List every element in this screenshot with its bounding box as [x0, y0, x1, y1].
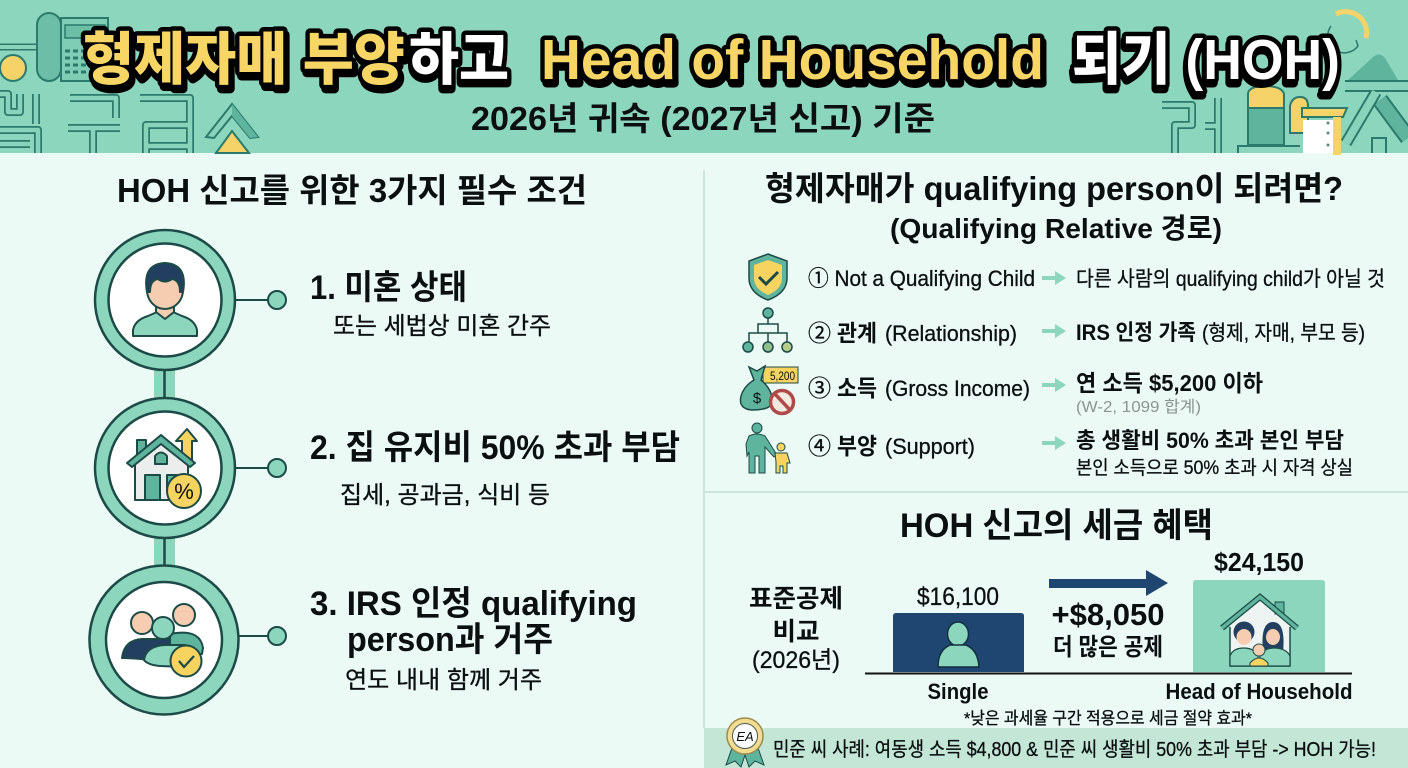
baseline	[865, 672, 1352, 674]
title: 형제자매 부양	[83, 28, 405, 92]
row 2 detail	[1076, 320, 1365, 345]
row 4 detail: 본인 소득으로 50% 초과 시 자격 상실	[1076, 457, 1353, 479]
title: 하고	[409, 32, 509, 96]
heading: qualifying person: 형제자매가 qualifying person이 되려면?	[765, 170, 1343, 207]
panel: HOH 3 requirements	[90, 172, 680, 714]
row 2 detail: IRS 인정 가족	[1076, 320, 1196, 345]
step 3 heading: person과 거주	[347, 621, 553, 659]
header band	[0, 0, 1408, 155]
row 3 detail	[1076, 370, 1263, 416]
row 4 label: 부양	[837, 433, 877, 459]
row 4 detail	[1076, 428, 1353, 479]
icon: family tree	[743, 308, 792, 352]
bar: head of household with family icon	[1193, 580, 1325, 672]
icon: shield	[749, 254, 787, 300]
title: 되기 (HOH)	[1072, 28, 1340, 92]
title: 형제자매 부양	[85, 32, 407, 96]
step 1 connector dot	[236, 291, 286, 309]
step 2 circle with house icon: %	[174, 479, 194, 504]
example banner	[704, 728, 1408, 768]
row 2 detail: (형제, 자매, 부모 등)	[1202, 322, 1365, 345]
title: Head of Household	[541, 28, 1044, 92]
row 3 label: ③	[808, 375, 831, 401]
step 3 heading: 3. IRS 인정 qualifying	[310, 585, 637, 623]
row 3 label: (Gross Income)	[885, 376, 1030, 401]
heading: qualifying person	[765, 170, 1343, 244]
row 3 label	[808, 375, 1030, 401]
step 1 heading: 1. 미혼 상태	[310, 269, 467, 307]
step 2 connector dot	[236, 459, 286, 477]
value: +$8,050: +$8,050	[1052, 597, 1164, 632]
step 2 detail: 집세, 공과금, 식비 등	[340, 482, 550, 509]
row 2 label: 관계	[837, 320, 877, 346]
title: Head of Household	[543, 32, 1046, 96]
heading: qualifying person: (Qualifying Relative 경로)	[890, 213, 1222, 244]
step 1 detail: 또는 세법상 미혼 간주	[333, 313, 551, 340]
panel: qualifying relative	[740, 170, 1385, 479]
row 2 label	[808, 320, 1017, 346]
comparison label: 비교	[772, 618, 820, 646]
icon: money bag with 5,200 tag: $	[753, 390, 762, 407]
panel: tax benefit	[749, 507, 1352, 728]
value: single: $16,100	[917, 583, 999, 611]
heading: requirements: HOH 신고를 위한 3가지 필수 조건	[117, 172, 587, 209]
label: head of household: Head of Household	[1166, 679, 1352, 704]
header decoration: right city shapes	[1162, 12, 1408, 155]
row 1 label: ① Not a Qualifying Child	[808, 266, 1035, 291]
icon: parent and child	[746, 423, 790, 473]
value: head of household: $24,150	[1214, 547, 1304, 577]
bar: single with person icon	[893, 613, 1024, 672]
icon: money bag with 5,200 tag: 5,200	[770, 369, 795, 383]
arrow: increase	[1049, 570, 1168, 596]
step 3 circle with family icon	[90, 566, 238, 714]
step 2 circle with house icon	[95, 398, 235, 538]
step 3 heading	[310, 585, 637, 659]
row 3 label: 소득	[837, 375, 877, 401]
heading: tax benefit: HOH 신고의 세금 혜택	[900, 507, 1213, 545]
title: 하고	[409, 28, 509, 92]
row 3 detail: 연 소득 $5,200 이하	[1076, 370, 1263, 396]
step 3 detail: 연도 내내 함께 거주	[345, 667, 542, 694]
header decoration: left city shapes	[0, 13, 258, 153]
footnote: *낮은 과세율 구간 적용으로 세금 절약 효과*	[964, 709, 1252, 728]
icon: EA ribbon badge: EA	[736, 729, 754, 744]
row 4 label	[808, 433, 975, 459]
row 3 detail: (W-2, 1099 합계)	[1076, 398, 1201, 416]
row 3 arrow	[1042, 378, 1066, 392]
label: single: Single	[928, 679, 988, 704]
icon: money bag with 5,200 tag	[740, 366, 798, 414]
row 4 detail: 총 생활비 50% 초과 본인 부담	[1076, 428, 1344, 453]
title	[83, 28, 1340, 96]
step 3 connector dot	[238, 627, 286, 645]
row 2 label: ②	[808, 320, 831, 346]
comparison label: (2026년)	[752, 647, 840, 674]
row 1 arrow	[1042, 271, 1066, 285]
row 1 detail: 다른 사람의 qualifying child가 아닐 것	[1076, 268, 1385, 291]
timeline connector	[154, 360, 175, 572]
panel dividers	[704, 170, 1408, 728]
row 4 label: (Support)	[885, 434, 975, 459]
comparison label: 표준공제	[749, 585, 843, 613]
row 2 label: (Relationship)	[885, 321, 1017, 346]
row 2 arrow	[1042, 324, 1066, 338]
title: 되기 (HOH)	[1071, 32, 1339, 96]
comparison label	[749, 585, 843, 674]
subtitle: 2026년 귀속 (2027년 신고) 기준	[471, 100, 935, 137]
row 4 label: ④	[808, 433, 831, 459]
step 1 circle with person icon	[95, 230, 235, 370]
icon: EA ribbon badge	[726, 718, 764, 767]
label: more deduction: 더 많은 공제	[1053, 634, 1163, 661]
step 2 heading: 2. 집 유지비 50% 초과 부담	[310, 429, 680, 467]
row 4 arrow	[1042, 436, 1066, 450]
